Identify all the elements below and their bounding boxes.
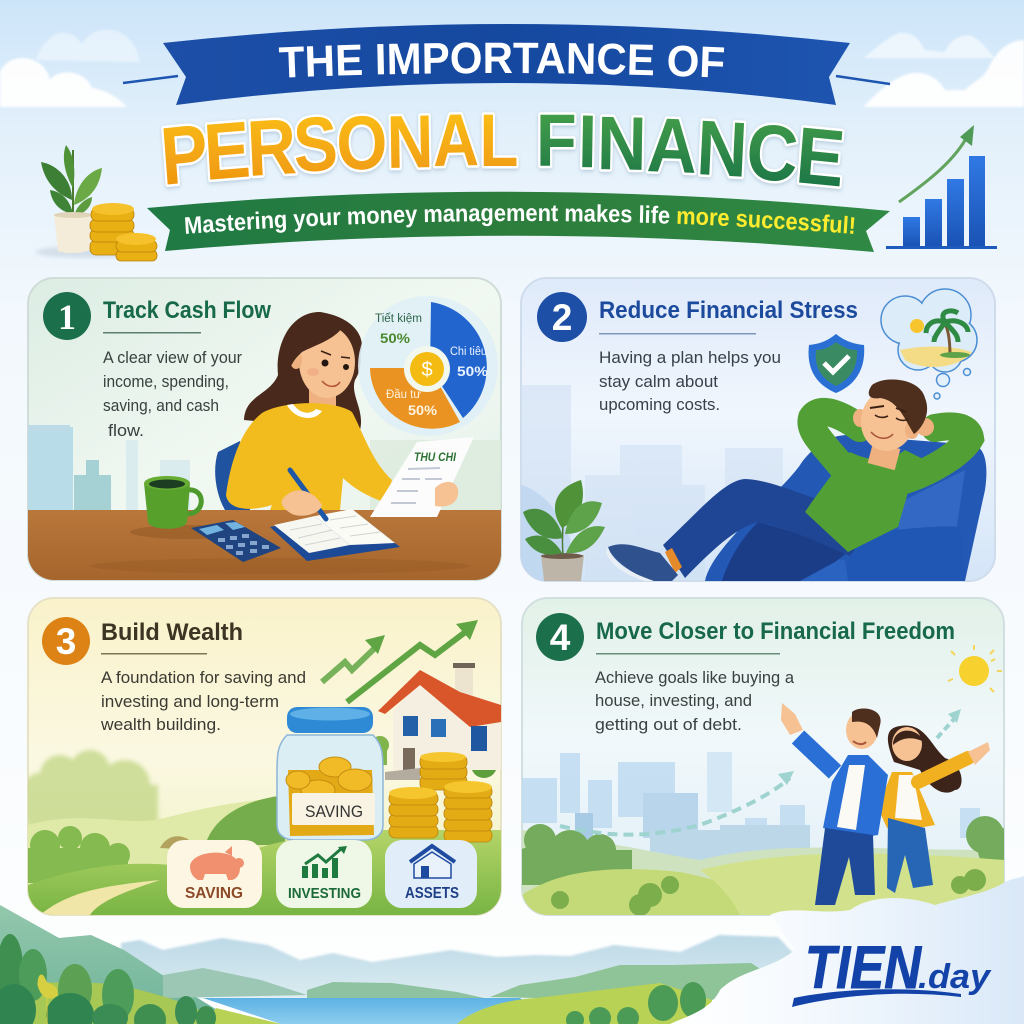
body text: wealth building. [100,715,221,734]
heading: track cash flow: Track Cash Flow [103,297,271,324]
couple pointing ahead [781,703,990,905]
title: personal finance: I [578,100,598,184]
body text: investing and long-term [101,692,279,711]
body text [100,668,306,734]
number badge 2: 2 [552,297,572,338]
woman at desk [215,312,392,519]
pie chart: budget: $ [421,359,433,381]
body text: getting out of debt. [595,715,742,734]
body text: house, investing, and [595,691,752,710]
number badge 2 [537,292,587,342]
body text: Having a plan helps you [599,348,781,367]
thought bubble: beach [881,289,977,399]
icon: sun [948,645,1002,692]
heading: reduce financial stress: Reduce Financial Stress [599,297,858,324]
icon: potted plant [523,480,605,581]
heading: build wealth: Build Wealth [101,619,243,646]
body text [103,348,242,440]
body text [599,348,781,414]
paper: thu chi [370,437,474,517]
title banner: the importance of [122,24,890,105]
pie chart: budget: 50% [380,330,411,346]
title: personal finance: N [597,102,647,187]
logo: tien.day: .day [918,958,992,996]
pie chart: budget: 50% [457,363,489,379]
badge: assets: ASSETS [405,885,459,902]
icon: open notebook [270,509,400,561]
body text: saving, and cash [103,396,219,415]
title: personal finance: E [793,111,848,204]
heading: move closer to financial freedom: Move Closer to Financial Freedom [596,618,955,645]
title: personal finance: L [480,100,518,182]
icon: calculator [191,520,281,562]
scene: city and plant [521,385,783,581]
panel: move closer to financial freedom [512,598,1022,916]
number badge 4 [536,613,584,661]
pie chart: budget: Chi tiêu [450,346,487,358]
pie chart: budget [358,296,498,436]
badge: saving: SAVING [185,885,243,902]
badge: investing: INVESTING [288,885,361,902]
number badge 3 [42,617,90,665]
badge: investing [276,840,372,908]
title: personal finance [158,99,848,204]
title: personal finance: C [744,107,801,199]
body text: Achieve goals like buying a [595,668,795,687]
growth arrows [322,620,478,702]
number badge 1: 1 [58,297,76,337]
pie chart: budget: Đầu tư [386,389,421,401]
body text: flow. [108,421,144,440]
number badge 4: 4 [550,617,571,658]
clouds [0,30,1024,107]
title: personal finance: N [695,104,750,194]
icon: coin stacks [389,752,492,842]
armchair and relaxing man [606,379,986,581]
title: personal finance: R [245,101,298,193]
badge: saving [167,840,262,908]
icon: savings jar: SAVING [305,802,363,821]
title: personal finance: N [386,100,434,184]
icon: plant and coins [35,145,157,261]
icon: savings jar [277,707,383,840]
body text: income, spending, [103,372,229,391]
body text: stay calm about [599,372,718,391]
title: personal finance: A [646,102,698,190]
pie chart: budget: Tiết kiệm [375,313,422,325]
title: personal finance: O [335,100,389,187]
panel: reduce financial stress [521,278,995,581]
logo: tien.day: TIEN [805,934,922,1001]
title: personal finance: P [158,108,211,203]
body text: A foundation for saving and [101,668,306,687]
badge: assets [385,840,477,908]
icon: shield check [809,334,864,393]
pie chart: budget: 50% [408,402,438,418]
paper: thu chi: THU CHI [414,450,457,464]
icon: house [378,663,501,780]
icon: green mug [144,476,201,529]
panel: build wealth [17,598,501,915]
cloud: lower right [670,876,1024,1024]
scene: hills [17,736,501,915]
number badge 1 [43,292,91,340]
icon: rising bar chart [886,125,997,249]
title: personal finance: S [292,101,340,189]
landscape footer [0,905,800,1024]
title: personal finance: F [536,99,577,182]
panel: track cash flow [28,278,501,580]
logo: tien.day [792,934,992,1007]
scene: city and hills [512,709,1022,916]
body text: upcoming costs. [599,395,720,414]
title: personal finance: E [201,104,253,197]
body text [595,668,795,734]
scene: city and desk [28,425,501,580]
subtitle ribbon [147,192,890,252]
body text: A clear view of your [103,348,242,367]
title: personal finance: A [432,99,479,182]
subtitle ribbon: Mastering your money management makes life more successful! [185,204,854,234]
number badge 3: 3 [56,621,76,662]
title banner: the importance of: THE IMPORTANCE OF [278,42,724,78]
